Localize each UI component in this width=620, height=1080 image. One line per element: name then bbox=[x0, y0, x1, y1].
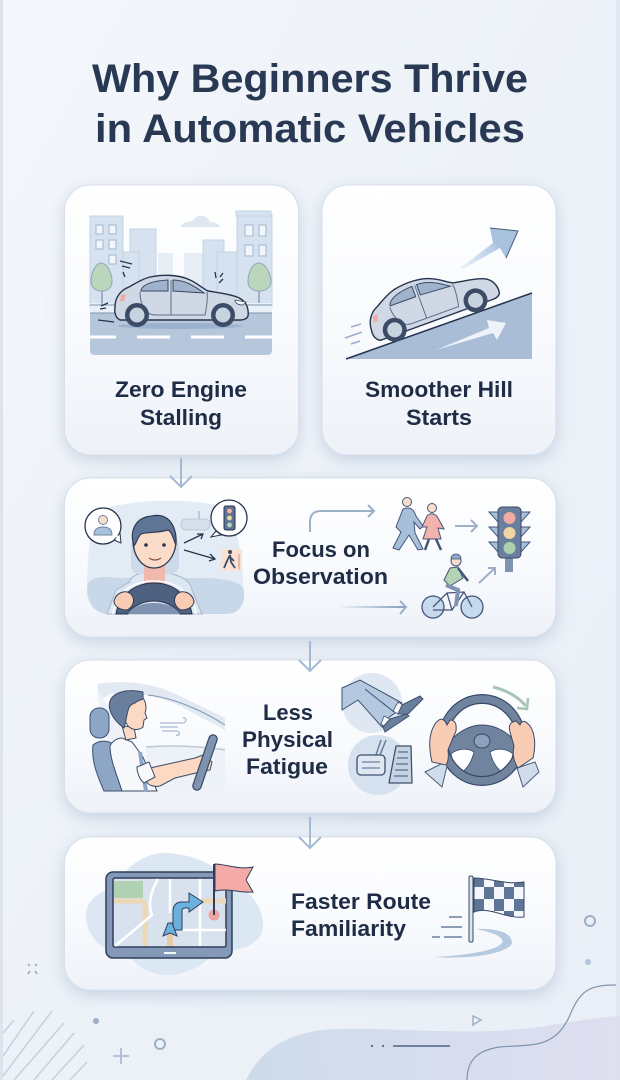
title bbox=[92, 57, 528, 151]
label: faster route familiarity: Faster Route bbox=[291, 889, 431, 914]
panel: zero engine stalling bbox=[64, 185, 298, 455]
illustration: car climbing a hill bbox=[345, 228, 532, 359]
title: Why Beginners Thrive bbox=[92, 57, 528, 101]
icon: traffic light speech bubble bbox=[211, 500, 247, 537]
label: focus on observation bbox=[253, 537, 388, 589]
label: zero engine stalling: Zero Engine bbox=[115, 377, 247, 402]
label: smoother hill starts: Starts bbox=[406, 405, 472, 430]
icon: checkered finish flag bbox=[432, 875, 524, 958]
illustration: relaxed driver in side view bbox=[90, 682, 225, 791]
title: in Automatic Vehicles bbox=[95, 107, 525, 151]
flow arrows bbox=[310, 505, 495, 614]
icon: passenger speech bubble bbox=[85, 508, 121, 544]
label: less physical fatigue: Less bbox=[263, 700, 313, 725]
label: focus on observation: Focus on bbox=[272, 537, 370, 562]
label: smoother hill starts: Smoother Hill bbox=[365, 377, 513, 402]
panel: smoother hill starts bbox=[322, 185, 556, 455]
label: faster route familiarity bbox=[291, 889, 431, 941]
illustration: city street with stalled car bbox=[90, 211, 272, 355]
icon: pedestrian sign bbox=[221, 549, 242, 571]
icon: relaxed legs bbox=[342, 673, 423, 733]
arrow: fatigue to route familiarity bbox=[299, 817, 321, 848]
label: zero engine stalling: Stalling bbox=[140, 405, 222, 430]
icon: traffic light bbox=[489, 507, 530, 572]
label: less physical fatigue bbox=[242, 700, 333, 779]
panel: faster route familiarity bbox=[64, 837, 556, 990]
arrow: stalling to observation bbox=[170, 458, 192, 487]
label: faster route familiarity: Familiarity bbox=[291, 916, 407, 941]
label: focus on observation: Observation bbox=[253, 564, 388, 589]
icon: steering wheel with hands bbox=[425, 687, 539, 787]
label: zero engine stalling bbox=[115, 377, 247, 430]
arrow: observation to fatigue bbox=[299, 641, 321, 671]
panel: focus on observation bbox=[64, 478, 556, 637]
gaze arrows bbox=[184, 534, 215, 561]
icon: cyclist bbox=[422, 554, 483, 618]
icon: pedestrians bbox=[393, 498, 444, 550]
panel: less physical fatigue bbox=[64, 660, 556, 813]
illustration: driver looking out through windshield bbox=[87, 501, 244, 614]
label: less physical fatigue: Fatigue bbox=[246, 754, 328, 779]
label: smoother hill starts bbox=[365, 377, 513, 430]
label: less physical fatigue: Physical bbox=[242, 727, 333, 752]
icon: pedals bbox=[348, 735, 412, 795]
illustration: navigation tablet with destination flag bbox=[86, 853, 263, 975]
decorative footer shapes bbox=[3, 916, 620, 1080]
